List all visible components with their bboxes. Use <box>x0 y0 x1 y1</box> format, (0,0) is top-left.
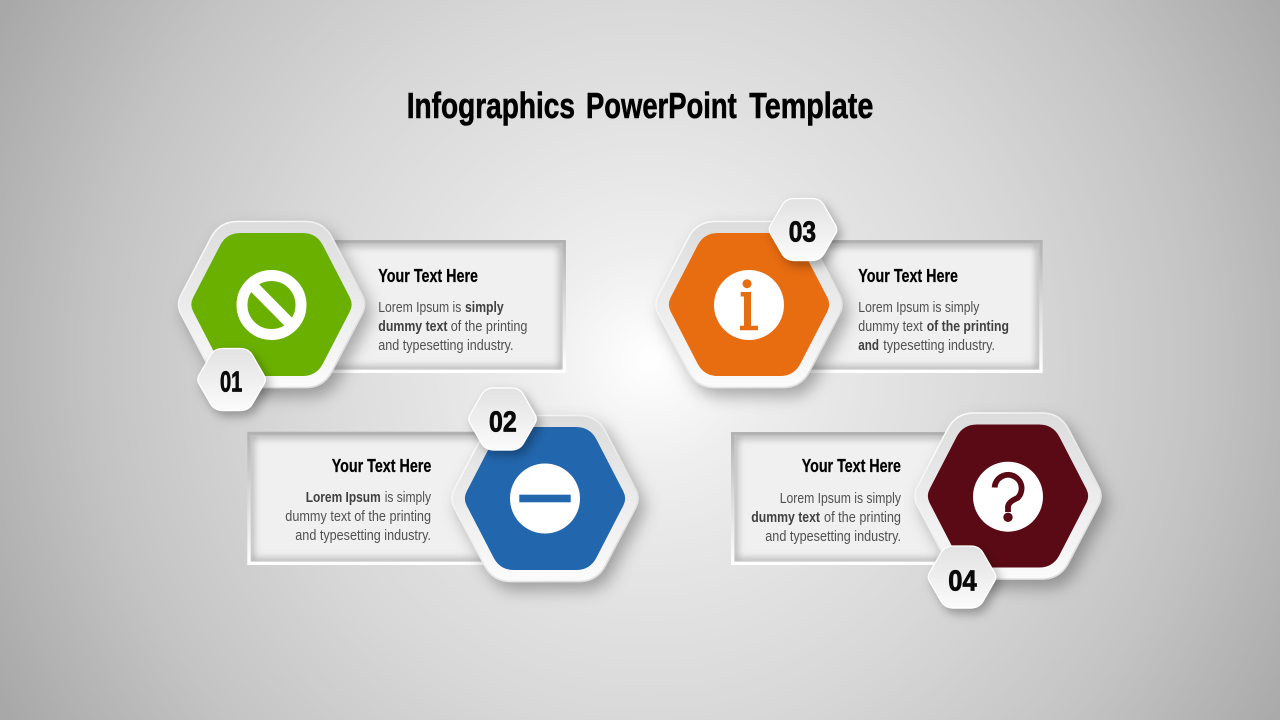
body text 02: Lorem Ipsum <box>306 490 381 506</box>
body text 03: of the printing <box>927 319 1009 335</box>
body text 02: is simply <box>385 490 432 506</box>
hexagon: item 02 blue <box>452 416 638 582</box>
title: Infographics <box>407 85 575 126</box>
badge: 04: 04 <box>948 566 977 598</box>
icon: information sign <box>714 270 784 340</box>
body text 01: simply <box>465 300 504 316</box>
badge: 02: 02 <box>489 407 517 439</box>
panel: item 03 text box <box>802 242 1041 371</box>
body text 01: dummy text <box>378 319 448 335</box>
body text 02: and typesetting industry. <box>295 528 431 544</box>
panel: item 04 text box <box>733 434 958 563</box>
heading 04: Your Text Here <box>802 456 901 476</box>
panel: item 02 text box <box>249 433 498 563</box>
hexagon: item 03 orange <box>656 222 842 388</box>
body text 02: dummy text of the printing <box>285 509 431 525</box>
title: PowerPoint <box>586 85 737 126</box>
body text 03: dummy text <box>858 319 923 335</box>
hexagon: item 01 green <box>179 222 364 388</box>
body text 04: dummy text <box>751 510 820 526</box>
body text 03: typesetting industry. <box>883 338 995 354</box>
body text 01 <box>378 300 528 354</box>
body text 01: of the printing <box>451 319 528 335</box>
badge: 03: 03 <box>789 217 816 249</box>
body text 04: of the printing <box>824 510 901 526</box>
body text 01: Lorem Ipsum is <box>378 300 461 316</box>
panel: item 01 text box <box>322 242 564 371</box>
badge: 01: 01 <box>220 367 242 399</box>
body text 04: Lorem Ipsum is simply <box>780 491 902 507</box>
icon: prohibited sign <box>242 276 301 334</box>
heading 03: Your Text Here <box>858 266 958 286</box>
title: Template <box>749 85 873 126</box>
heading 01: Your Text Here <box>378 266 478 286</box>
body text 03: Lorem Ipsum is simply <box>858 300 980 316</box>
badge: 04 <box>928 546 996 608</box>
badge: 03 <box>769 198 837 260</box>
icon: question mark <box>973 462 1043 532</box>
icon: minus sign <box>510 464 580 534</box>
body text 03: and <box>858 338 879 354</box>
body text 04: and typesetting industry. <box>765 529 901 545</box>
body text 04 <box>751 491 902 545</box>
hexagon: item 04 maroon <box>915 413 1101 579</box>
title <box>407 85 873 126</box>
heading 02: Your Text Here <box>332 456 431 476</box>
body text 03 <box>858 300 1009 354</box>
body text 01: and typesetting industry. <box>378 338 514 354</box>
body text 02 <box>285 490 432 544</box>
badge: 02 <box>469 388 536 450</box>
badge: 01 <box>198 348 265 410</box>
